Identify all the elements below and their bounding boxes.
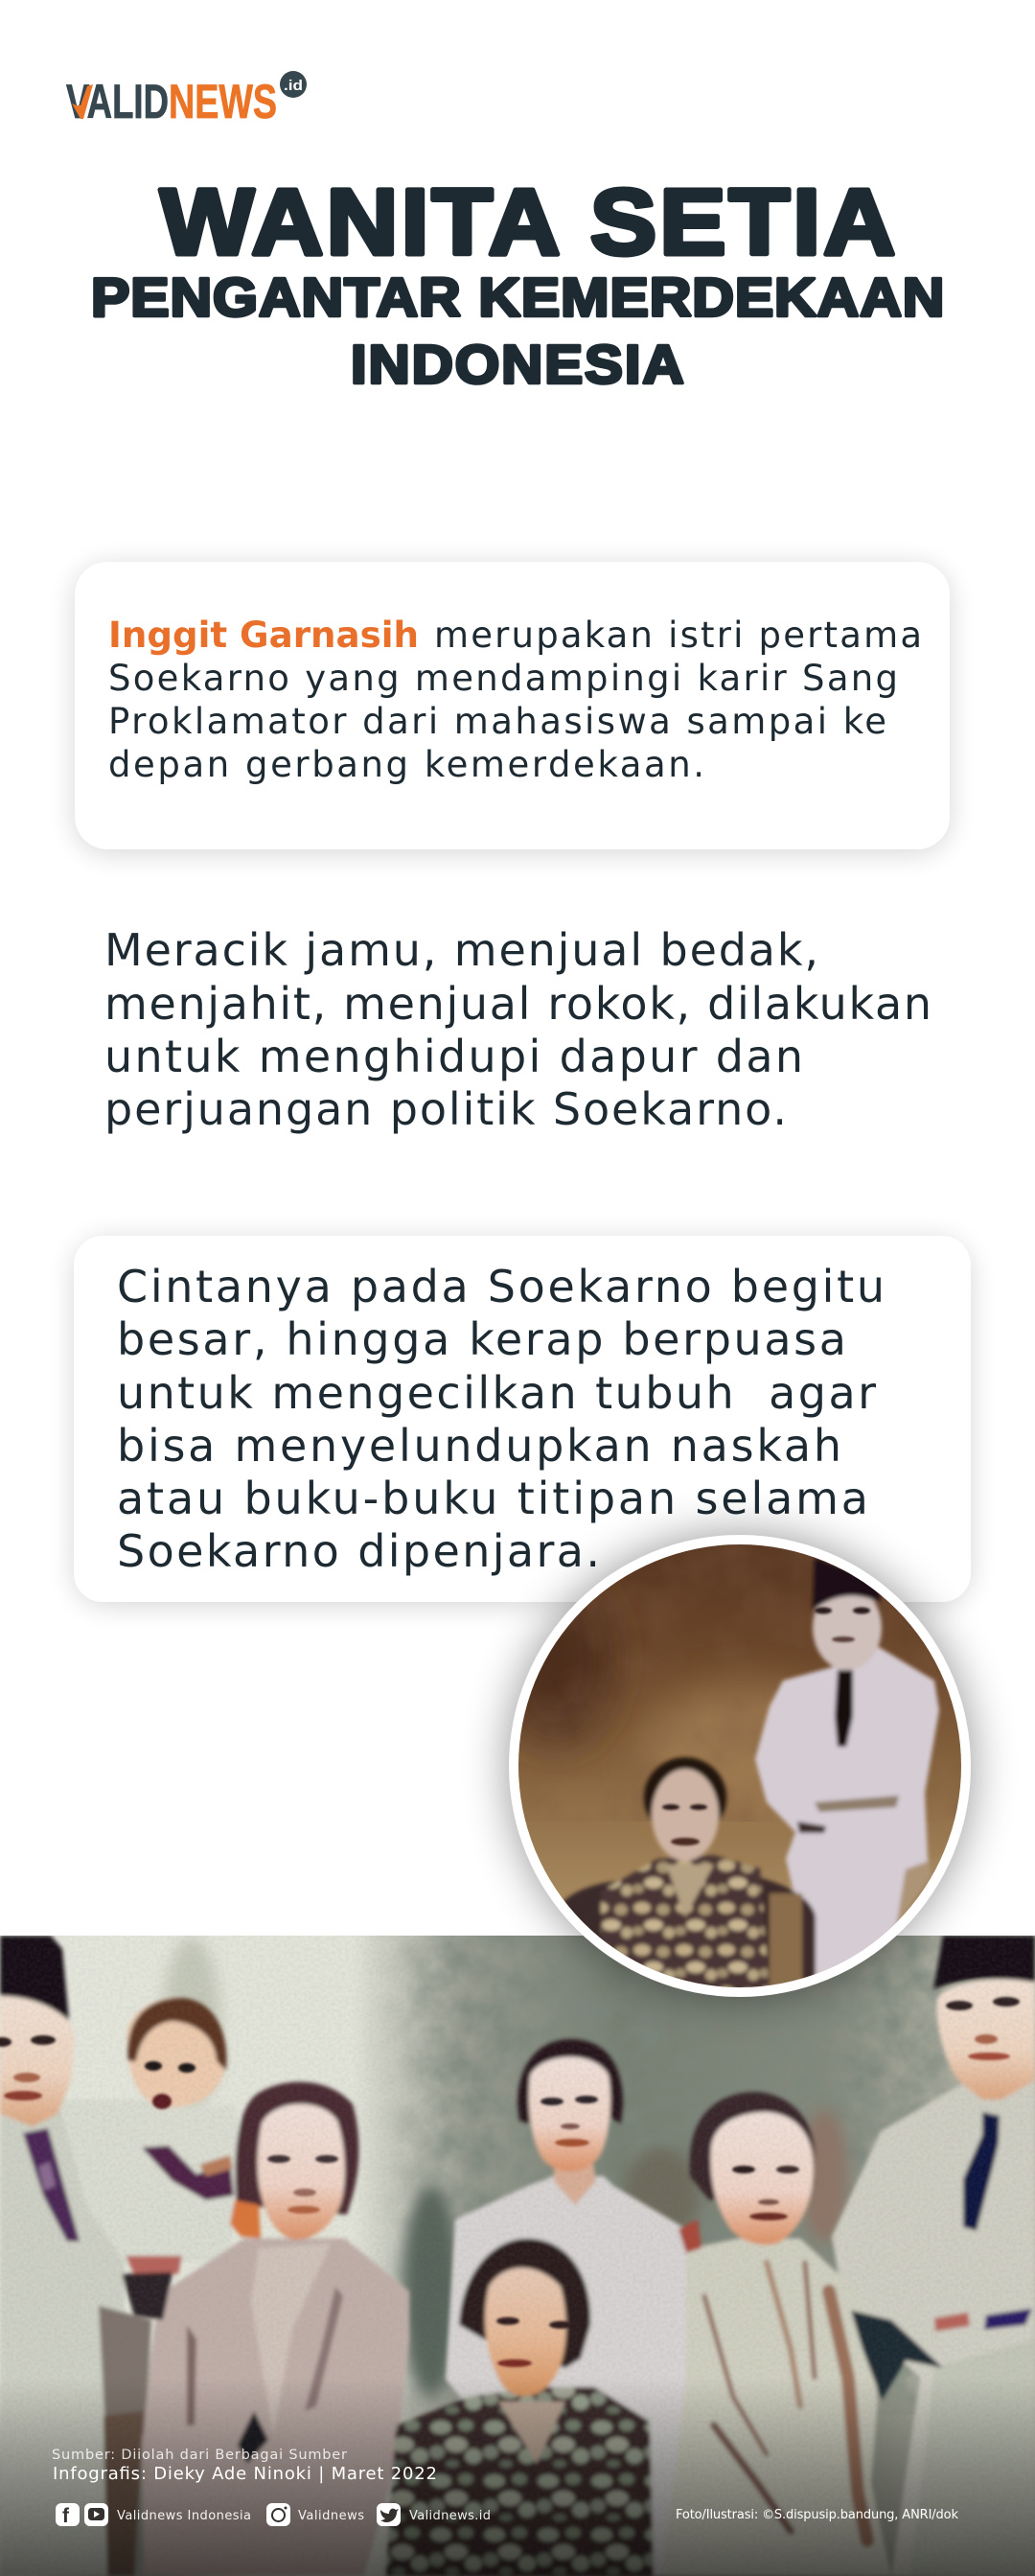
logo: Validnews.id: .id [284,78,303,94]
woman 2 body [446,2176,704,2576]
man left: body [0,2109,125,2576]
man right face [936,1980,1035,2100]
icon: youtube [84,2503,108,2526]
text block: livelihood [104,924,932,1135]
credits: source and author: Sumber: Diiolah dari Berbagai Sumber [52,2448,347,2463]
woman: face [652,1769,719,1861]
man left: face [0,1996,75,2126]
panel: love card [74,1236,971,1606]
logo: Validnews.id [66,71,307,128]
text block: livelihood: menjahit, menjual rokok, dilakukan [104,978,932,1030]
man left: fez [0,1936,69,2021]
woman 1 face [258,2104,345,2239]
woman 1 kebaya [142,2239,409,2576]
photo: Inggit and Soekarno circle [498,1534,972,1998]
man right tie [963,2112,1000,2231]
panel: intro card [75,562,950,853]
panel: love card: Cintanya pada Soekarno begitu [117,1261,885,1312]
panel: intro card: Proklamator dari mahasiswa sampai ke [108,701,886,742]
man right shirt [832,2071,1035,2576]
baby head [126,1998,226,2107]
title: PENGANTAR KEMERDEKAAN [91,267,944,328]
icon: facebook [56,2503,80,2527]
logo: Validnews.id: NEWS [169,75,277,128]
panel: love card: atau buku-buku titipan selama [117,1473,868,1524]
icon: instagram [266,2503,290,2526]
panel: love card: untuk mengecilkan tubuh agar [117,1367,876,1419]
photo: family group [0,1936,1035,2576]
panel: love card: Soekarno dipenjara. [117,1525,600,1577]
panel: love card: besar, hingga kerap berpuasa [117,1313,846,1365]
woman 2 hair and face [518,2039,623,2123]
man right fez [933,1936,1035,1989]
title: INDONESIA [351,335,684,395]
woman: hair [644,1757,726,1838]
man right fold [851,2310,943,2400]
man: fez [813,1558,880,1611]
woman: batik [601,1855,770,1994]
credits: source and author: Infografis: Dieky Ade Ninoki | Maret 2022 [53,2464,437,2484]
man: face [813,1586,882,1670]
panel: intro card: depan gerbang kemerdekaan. [108,744,704,785]
panel: intro card: Soekarno yang mendampingi karir Sang [108,658,898,699]
text: facebook and youtube handle: Validnews Indonesia [117,2509,251,2523]
icon: twitter [377,2503,401,2526]
icon: facebook: f [62,2505,70,2527]
text block: livelihood: Meracik jamu, menjual bedak, [104,924,818,976]
woman 3 seated: batik [386,2387,654,2576]
bottom fade [0,2378,1035,2576]
hand and pants [126,2256,182,2274]
text: instagram handle: Validnews [298,2509,364,2523]
woman 1 hair [236,2082,358,2215]
baby dress and arm [215,2107,240,2197]
title [91,171,944,395]
text: website handle: Validnews.id [409,2509,491,2523]
faces: eyes and mouths [31,2035,56,2045]
text: photo credit: Foto/Ilustrasi: ©S.dispusip.bandung, ANRI/dok [676,2508,958,2522]
woman 4 body [661,2239,891,2576]
chair [562,1881,623,1984]
panel: intro card: merupakan istri pertama [434,615,922,656]
man left: tie [23,2128,80,2241]
logo: Validnews.id: VALID [66,75,169,128]
title: WANITA SETIA [160,171,895,274]
panel: intro card: Inggit Garnasih [108,615,419,656]
photo grain [0,1936,1033,2443]
woman 4 hair and face [689,2092,815,2200]
woman 3 hair and face [459,2239,590,2368]
panel: love card: bisa menyelundupkan naskah [117,1420,841,1472]
text block: livelihood: untuk menghidupi dapur dan [104,1031,803,1082]
man: suit [755,1647,939,1984]
text block: livelihood: perjuangan politik Soekarno. [104,1083,787,1135]
credits: source and author [52,2448,437,2484]
